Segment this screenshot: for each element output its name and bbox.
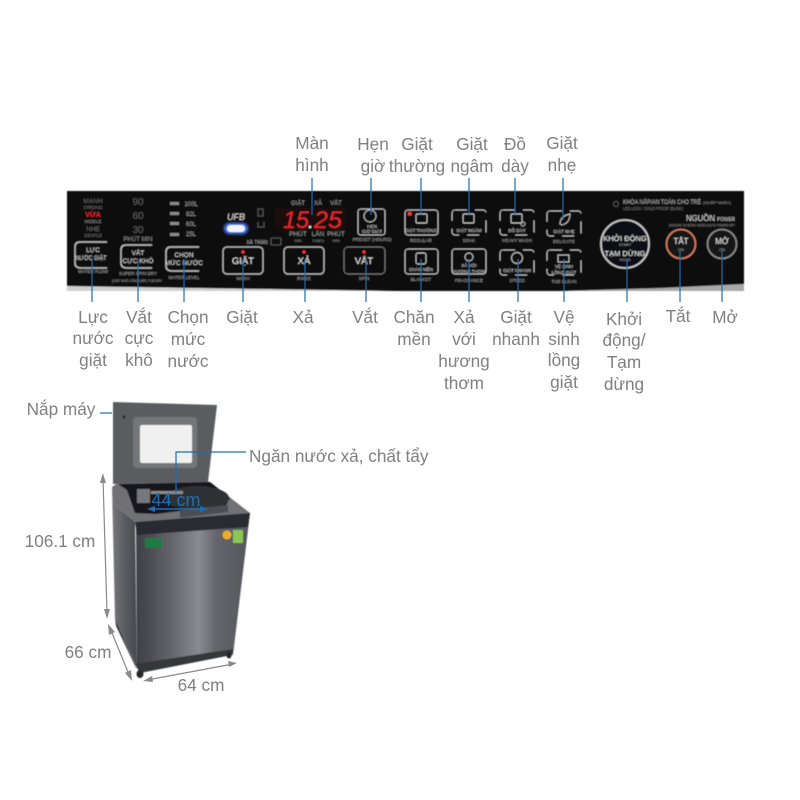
rinse button <box>284 247 324 281</box>
start pause button: KHỞI ĐỘNG <box>603 234 647 243</box>
LED display: MIN <box>294 238 302 243</box>
wash strength options: VỪA <box>85 210 101 219</box>
label: heavy wash <box>501 134 529 215</box>
power on button <box>708 230 736 258</box>
label: soak <box>450 134 494 215</box>
label: fragrance rinse: với <box>452 329 476 349</box>
label: screen: hình <box>295 155 329 175</box>
delicate button <box>547 211 581 244</box>
label: water flow: giặt <box>79 350 107 370</box>
label: wash <box>226 259 258 327</box>
water level button <box>165 247 203 280</box>
power on button: MỞ <box>715 237 729 246</box>
label: fragrance rinse: hương <box>438 351 490 371</box>
label: tub clean <box>548 259 580 392</box>
wash strength options: MIDDLE <box>84 219 102 224</box>
label: super spin <box>125 259 154 370</box>
fragrance button: XẢ VỚI <box>461 262 477 268</box>
blanket button: CHĂN MỀN <box>409 266 433 272</box>
label: water level: nước <box>168 351 209 371</box>
wash strength options: STRONG <box>83 205 103 210</box>
power on button: ON <box>719 247 725 252</box>
tub clean button <box>547 250 581 284</box>
control strip <box>135 513 250 535</box>
speed button: SPEED <box>509 278 525 283</box>
regular button <box>405 210 438 243</box>
label: preset <box>357 134 389 215</box>
water level button: WATER LEVEL <box>168 275 200 280</box>
compartment label: Ngăn nước xả, chất tẩy <box>249 446 429 466</box>
super spin button: VẮT <box>132 248 144 257</box>
energy sticker <box>145 538 162 548</box>
label: start pause <box>602 259 646 394</box>
label: water flow <box>73 259 114 370</box>
power off button: ON <box>678 247 684 252</box>
label: screen: Màn <box>295 133 329 153</box>
tub clean button: LỒNG GIẶT <box>552 269 576 275</box>
label: off <box>666 251 691 326</box>
spin button <box>344 247 385 281</box>
water level options: 25L <box>186 232 197 238</box>
start pause button: TẠM DỪNG <box>604 249 646 258</box>
label: delicate: Giặt <box>546 133 578 153</box>
label: fragrance rinse: Xả <box>453 307 475 327</box>
fragrance button: HƯƠNG THƠM <box>453 269 485 274</box>
water level options <box>170 202 198 238</box>
LED display: VẮT <box>330 199 342 207</box>
width dimension: 64 cm <box>178 675 224 695</box>
super spin button: SUPER SPIN DRY <box>119 271 157 276</box>
LED display: TIMES <box>312 238 324 243</box>
fragrance button <box>452 249 486 283</box>
label: fragrance rinse <box>438 259 490 393</box>
label: delicate <box>546 133 578 220</box>
label: blanket <box>393 259 435 349</box>
label: on <box>712 251 738 327</box>
LED display: PHÚT <box>327 229 345 238</box>
tub opening <box>118 482 230 514</box>
label: water flow: Lực <box>78 307 108 327</box>
label: rinse: Xả <box>292 307 314 327</box>
label: off: Tắt <box>666 306 691 326</box>
orange badge <box>222 530 232 540</box>
spin time options: PHÚT MIN <box>124 236 152 243</box>
delicate button: GIẶT NHẸ <box>553 228 575 234</box>
spin time options: 30 <box>132 225 144 236</box>
wash button <box>223 247 263 281</box>
spin time options: 90 <box>132 197 144 208</box>
label: blanket: Chăn <box>393 307 435 327</box>
bottom callouts <box>73 251 738 394</box>
start pause button: HOLD <box>619 257 631 262</box>
water flow button: WATER FLOW <box>78 269 109 274</box>
label: regular wash: Giặt <box>401 134 433 154</box>
power off button <box>666 230 696 258</box>
LED display: 25 <box>313 207 343 234</box>
LED display: GIẶT <box>291 200 305 207</box>
machine side <box>112 487 137 668</box>
label: water level <box>167 259 209 371</box>
heavy wash button: ĐỒ DÀY <box>508 227 526 233</box>
label: preset: Hẹn <box>357 134 389 154</box>
preset button: GIỜ GIẶT <box>362 228 382 234</box>
fragrance button: FRAGRANCE <box>455 278 483 283</box>
overflow indicator: XẢ TRÀN <box>246 239 268 246</box>
start pause button: START <box>619 242 632 247</box>
label: start pause: Tạm <box>607 352 641 372</box>
tub clean button: TUB CLEAN <box>551 279 577 284</box>
label: spin <box>352 259 378 327</box>
blanket button <box>405 249 438 282</box>
heavy wash button <box>500 210 534 243</box>
depth dimension: 66 cm <box>65 642 111 662</box>
label: heavy wash: dày <box>501 156 529 176</box>
power heading: POWER <box>717 217 735 223</box>
water level options: 82L <box>186 212 197 218</box>
blanket button: BLANKET <box>411 277 432 282</box>
power heading <box>669 212 735 228</box>
power heading: (NGUỒN TỰ ĐỘNG NGẮT) AUTO POWER OFF <box>669 222 735 228</box>
wash button: WASH <box>236 276 250 281</box>
power heading: NGUỒN <box>686 212 715 223</box>
heavy wash button: HEAVY WASH <box>502 238 532 243</box>
label: water level: mức <box>171 329 206 349</box>
label: regular wash: thường <box>389 156 445 176</box>
height dimension: 106.1 cm <box>25 531 95 551</box>
spin button: VẮT <box>355 256 373 267</box>
delicate button: DELICATE <box>553 239 575 244</box>
label: spin: Vắt <box>352 307 378 327</box>
preset button: HẸN <box>367 224 377 229</box>
control panel <box>67 191 744 291</box>
tub clean button: VỆ SINH <box>555 262 573 269</box>
water level options: 100L <box>184 202 198 208</box>
water flow button <box>75 242 109 274</box>
lid lock note <box>613 198 732 211</box>
label: quick wash: Giặt <box>500 307 532 327</box>
display keys <box>180 505 228 518</box>
label: screen <box>295 133 329 215</box>
regular button: GIẶT THƯỜNG <box>405 227 438 233</box>
LED display: MIN <box>332 238 340 243</box>
soak button: SOAK <box>463 238 475 243</box>
compartment label <box>176 446 429 493</box>
LED display: LẦN <box>312 228 325 238</box>
soak button <box>452 210 486 243</box>
label: tub clean: giặt <box>550 372 578 392</box>
wash strength options <box>83 198 103 238</box>
preset button <box>353 209 392 242</box>
label: blanket: mền <box>397 329 431 349</box>
machine lid <box>113 402 217 484</box>
machine base <box>115 618 233 678</box>
super spin button: (GIẶT KHÔ LỒNG GIẶT) TUB DRY <box>112 278 162 283</box>
label: tub clean: Vệ <box>553 307 575 327</box>
wash button: GIẶT <box>232 256 254 267</box>
top callouts <box>295 133 578 220</box>
label: super spin: cực <box>125 328 154 348</box>
spin time options <box>124 197 152 243</box>
label: regular wash <box>389 134 445 215</box>
rinse button: XẢ <box>298 255 311 267</box>
UFB indicator: UFB <box>227 212 245 222</box>
label: start pause: động/ <box>602 330 646 350</box>
rinse button: RINSE <box>297 276 311 281</box>
green label <box>233 530 243 543</box>
water level options: 60L <box>186 222 197 228</box>
water flow button: LỰC <box>86 247 100 254</box>
wash strength options: NHẸ <box>86 226 101 233</box>
lid lock note: (NHẤP NHÁY) <box>703 200 732 205</box>
UFB indicator <box>224 212 248 234</box>
machine deck <box>112 482 250 522</box>
LED display <box>275 199 345 243</box>
label: soak: ngâm <box>450 156 494 176</box>
preset button: PRESET (HOURS) <box>353 237 392 242</box>
label: wash: Giặt <box>226 307 258 327</box>
height dimension <box>25 473 110 619</box>
label: fragrance rinse: thơm <box>444 373 484 393</box>
label: super spin: Vắt <box>126 307 152 327</box>
width 44 cm: 44 cm <box>151 490 201 510</box>
spin button: SPIN <box>359 276 369 281</box>
spin time options: 60 <box>132 211 144 222</box>
super spin button <box>112 245 162 283</box>
label: on: Mở <box>712 307 738 327</box>
power off button: TẮT <box>673 237 689 246</box>
lid lock note: KHÓA NẮP/AN TOÀN CHO TRẺ <box>623 198 701 206</box>
washing machine <box>112 402 250 678</box>
label: start pause: Khởi <box>606 309 642 329</box>
water level button: CHỌN <box>174 252 194 259</box>
LED display: XẢ <box>314 200 322 207</box>
label: super spin: khô <box>125 350 153 370</box>
label: quick wash: nhanh <box>492 329 540 349</box>
label: tub clean: lồng <box>548 350 580 370</box>
soak button: GIẶT NGÂM <box>456 227 482 233</box>
super spin button: CỰC KHÔ <box>123 256 153 265</box>
machine front <box>136 513 250 668</box>
speed button: GIẶT NHANH <box>503 267 531 273</box>
wash strength options: MẠNH <box>83 198 103 205</box>
label: rinse <box>292 259 314 327</box>
label: start pause: dừng <box>604 374 644 394</box>
wash strength options: GENTLE <box>84 233 102 238</box>
water level button: MỨC NƯỚC <box>165 258 203 267</box>
lid label: Nắp máy <box>27 399 96 419</box>
LED display: PHÚT <box>289 229 307 238</box>
start pause button <box>601 220 649 268</box>
label: soak: Giặt <box>456 134 488 154</box>
overflow indicator <box>246 209 281 246</box>
width dimension <box>143 661 237 695</box>
label: water level: Chọn <box>167 307 209 327</box>
speed button <box>500 250 534 283</box>
label: preset: giờ <box>361 156 385 176</box>
regular button: REGULAR <box>410 238 433 243</box>
LED display: 15 <box>283 207 310 234</box>
label: quick wash <box>492 259 540 349</box>
water flow button: NƯỚC GIẶT <box>76 253 107 262</box>
label: delicate: nhẹ <box>548 155 576 175</box>
label: tub clean: sinh <box>548 329 580 349</box>
label: water flow: nước <box>73 328 114 348</box>
label: heavy wash: Đồ <box>504 134 526 154</box>
depth dimension <box>65 624 132 681</box>
lid lock note: LED LOCK / CHILD PROOF (BLINK) <box>623 206 683 211</box>
